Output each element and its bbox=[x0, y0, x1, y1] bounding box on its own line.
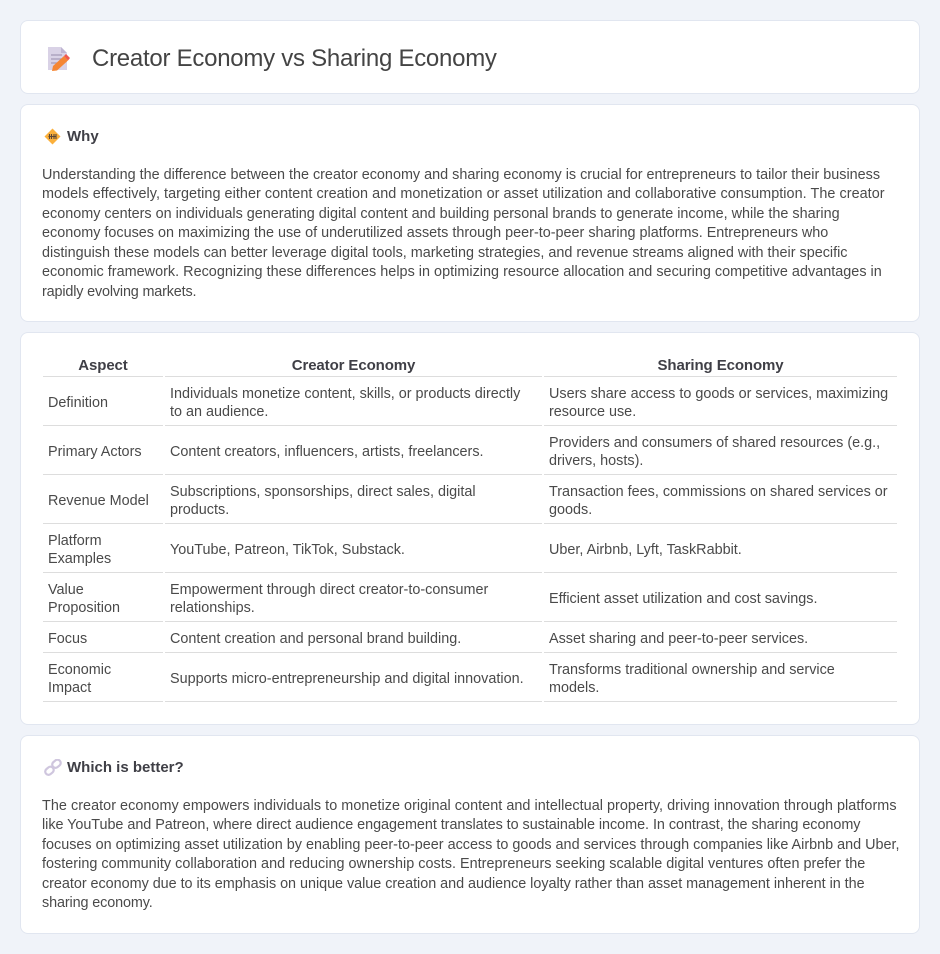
text block: verdict bbox=[42, 798, 900, 911]
text block: why explanation bbox=[42, 167, 885, 300]
comparison table: Economic bbox=[48, 662, 111, 678]
heading: which is better: Which is better? bbox=[67, 759, 184, 776]
title: Creator Economy vs Sharing Economy bbox=[92, 45, 497, 72]
comparison table: Focus bbox=[48, 631, 87, 647]
comparison table: Impact bbox=[48, 680, 91, 696]
comparison table: drivers, hosts). bbox=[549, 453, 643, 469]
text block: why explanation: economy focuses on maximizing the use of underutilized assets through peer-to-peer sharing platforms. Entrepreneurs who bbox=[42, 225, 828, 241]
comparison table: Primary Actors bbox=[48, 444, 142, 460]
comparison table: Content creation and personal brand building. bbox=[170, 631, 461, 647]
text block: why explanation: Understanding the difference between the creator economy and sharing economy is crucial for entrepreneurs to tailor their business bbox=[42, 167, 880, 183]
comparison table: relationships. bbox=[170, 600, 255, 616]
comparison table: Asset sharing and peer-to-peer services. bbox=[549, 631, 808, 647]
comparison table: Supports micro-entrepreneurship and digital innovation. bbox=[170, 671, 524, 687]
comparison table: Providers and consumers of shared resources (e.g., bbox=[549, 435, 880, 451]
comparison table: Revenue Model bbox=[48, 493, 149, 509]
heading: why: Why bbox=[67, 128, 99, 145]
text block: verdict: fostering community collaboration and reducing ownership costs. Entrepreneurs seeking scalable digital ventures often prefer the bbox=[42, 856, 865, 872]
text block: why explanation: models effectively, targeting either content creation and monetization or asset utilization and collaborative consumption. The creator bbox=[42, 186, 885, 202]
comparison table: Individuals monetize content, skills, or products directly bbox=[170, 386, 520, 402]
comparison table: Uber, Airbnb, Lyft, TaskRabbit. bbox=[549, 542, 742, 558]
comparison table: Empowerment through direct creator-to-consumer bbox=[170, 582, 488, 598]
text block: verdict: The creator economy empowers individuals to monetize original content and intellectual property, driving innovation through platforms bbox=[42, 798, 897, 814]
comparison table: Platform bbox=[48, 533, 102, 549]
text block: why explanation: economy centers on individuals generating digital content and building personal brands to generate income, while the sharing bbox=[42, 206, 840, 222]
text block: verdict: like YouTube and Patreon, where direct audience engagement translates to sustainable income. In contrast, the sharing economy bbox=[42, 817, 860, 833]
comparison table: Efficient asset utilization and cost savings. bbox=[549, 591, 818, 607]
comparison table: goods. bbox=[549, 502, 592, 518]
comparison table: Examples bbox=[48, 551, 111, 567]
comparison table: Definition bbox=[48, 395, 108, 411]
text block: verdict: focuses on optimizing asset utilization by enabling peer-to-peer access to goods and services through companies like Airbnb and Uber, bbox=[42, 837, 900, 853]
comparison table: YouTube, Patreon, TikTok, Substack. bbox=[170, 542, 405, 558]
comparison table: Subscriptions, sponsorships, direct sales, digital bbox=[170, 484, 476, 500]
comparison table: Transaction fees, commissions on shared services or bbox=[549, 484, 888, 500]
icon: document with pencil bbox=[48, 47, 70, 71]
text block: why explanation: distinguish these models can better leverage digital tools, marketing strategies, and revenue streams aligned with their specific bbox=[42, 245, 848, 261]
comparison table: Creator Economy bbox=[292, 357, 415, 374]
comparison table: Content creators, influencers, artists, freelancers. bbox=[170, 444, 484, 460]
comparison table bbox=[43, 357, 897, 702]
comparison table: to an audience. bbox=[170, 404, 268, 420]
panel: title header bbox=[20, 20, 920, 94]
comparison table: Value bbox=[48, 582, 84, 598]
comparison table: resource use. bbox=[549, 404, 636, 420]
text block: verdict: creator economy due to its emphasis on unique value creation and audience loyalty rather than asset management inherent in the bbox=[42, 876, 865, 892]
comparison table: Transforms traditional ownership and service bbox=[549, 662, 835, 678]
text block: verdict: sharing economy. bbox=[42, 895, 153, 911]
text block: why explanation: rapidly evolving markets. bbox=[42, 284, 196, 300]
comparison table: products. bbox=[170, 502, 229, 518]
panel: why bbox=[20, 104, 920, 322]
panel: which is better bbox=[20, 735, 920, 934]
comparison table: Users share access to goods or services, maximizing bbox=[549, 386, 888, 402]
panel: comparison table bbox=[20, 332, 920, 725]
icon: warning diamond bbox=[44, 128, 60, 144]
comparison table: Aspect bbox=[78, 357, 128, 374]
text block: why explanation: economic framework. Recognizing these differences helps in optimizing resource allocation and securing competitive advantages in bbox=[42, 264, 882, 280]
comparison table: Proposition bbox=[48, 600, 120, 616]
comparison table: Sharing Economy bbox=[657, 357, 784, 374]
comparison table: models. bbox=[549, 680, 599, 696]
icon: link bbox=[44, 759, 62, 776]
